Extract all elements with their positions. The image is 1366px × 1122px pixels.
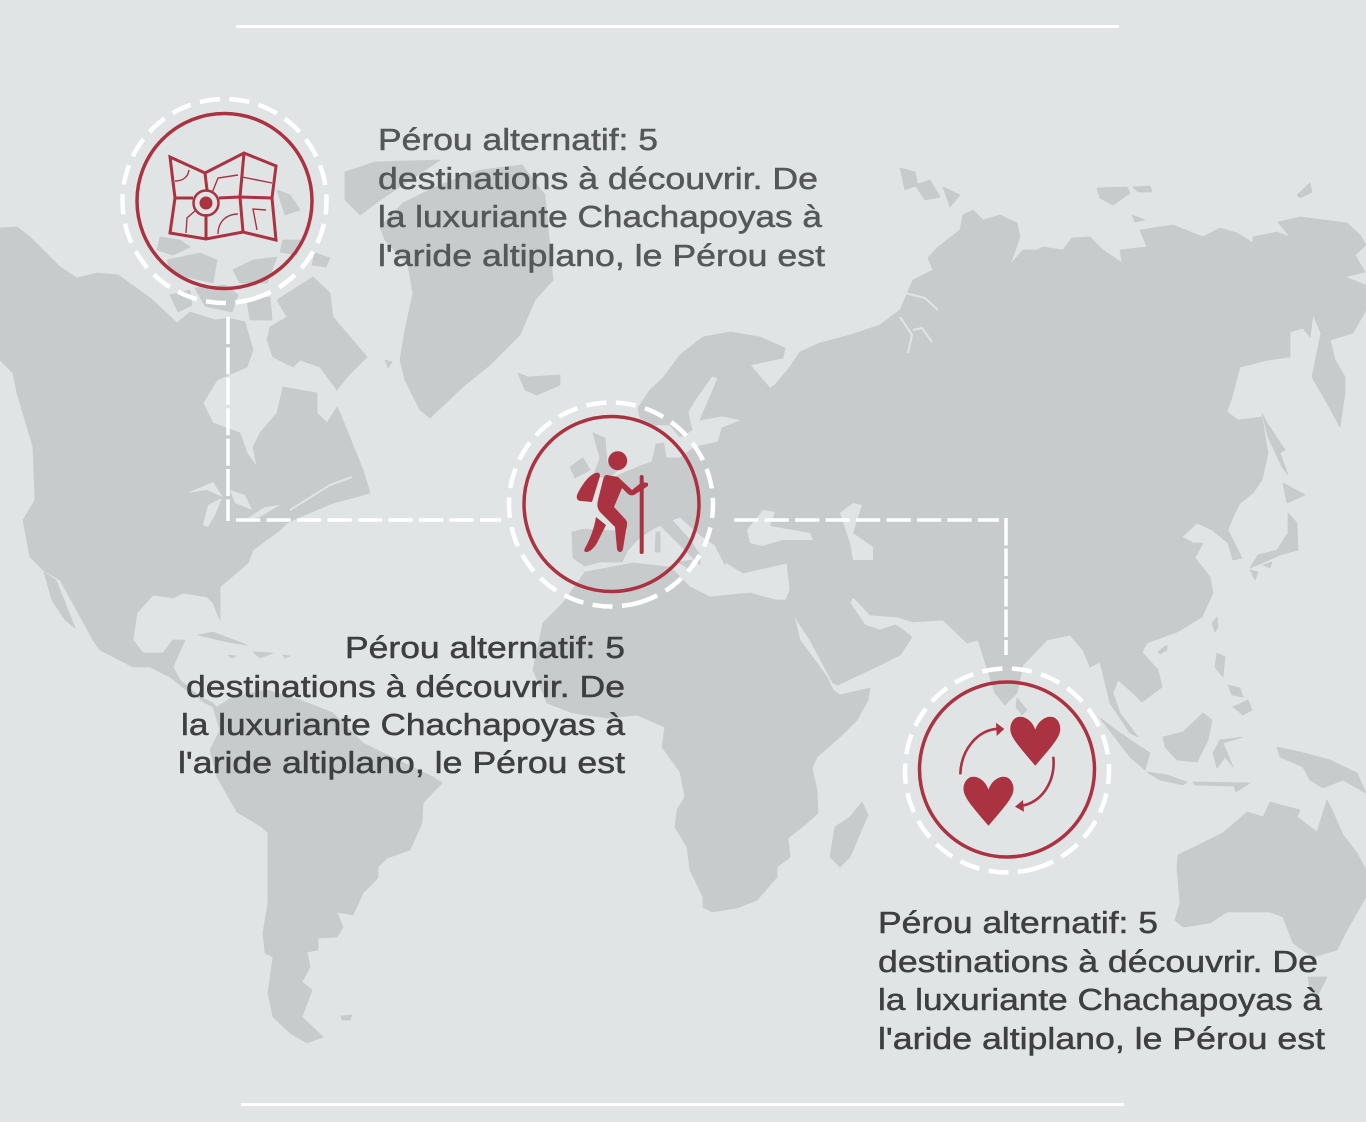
text block 1: la luxuriante Chachapoyas à	[378, 199, 823, 234]
text block 2: Pérou alternatif: 5	[345, 630, 625, 665]
text block 3	[878, 905, 1325, 1056]
land: Great Britain and Ireland	[570, 433, 618, 478]
text block 3: Pérou alternatif: 5	[878, 905, 1158, 940]
land: Baja California	[44, 572, 75, 628]
red ring	[920, 682, 1094, 857]
land: Arctic islands	[157, 160, 440, 390]
text block 1: destinations à découvrir. De	[378, 161, 818, 196]
river and estuary channels	[290, 293, 938, 510]
land: Philippines	[1215, 653, 1252, 715]
water: Black Sea	[747, 510, 813, 546]
inland waters	[187, 482, 873, 560]
land: Java and Sunda islands	[1147, 772, 1250, 792]
land: northern islands	[900, 168, 1312, 222]
land: Africa	[533, 563, 870, 912]
text block 1: l'aride altiplano, le Pérou est	[378, 238, 825, 273]
red ring	[137, 114, 312, 288]
text block 1	[378, 122, 825, 273]
water: Great Lakes	[187, 482, 280, 527]
water: Caspian Sea	[840, 503, 873, 560]
land: Madagascar	[830, 802, 868, 867]
land: South America	[200, 690, 442, 1043]
land: Eurasia	[572, 210, 1366, 737]
icon circle 2: hiker	[509, 402, 713, 606]
icon circle 3: hearts	[905, 668, 1109, 872]
land: North America	[0, 227, 370, 708]
land: Mediterranean islands	[655, 532, 692, 568]
land: Greenland	[380, 165, 553, 418]
dashed ring	[122, 99, 326, 303]
red ring	[524, 416, 699, 592]
world map background	[0, 160, 1366, 1043]
land: Australia	[1175, 800, 1366, 957]
top rule	[236, 25, 1119, 28]
icon: folded map	[170, 153, 276, 240]
icon circle 1: map	[122, 99, 326, 303]
text block 2: l'aride altiplano, le Pérou est	[178, 745, 625, 780]
land: Sakhalin	[1262, 413, 1288, 475]
land: Sulawesi	[1213, 737, 1243, 768]
connector: map to hiker	[228, 317, 501, 521]
land: Japan	[1250, 483, 1305, 580]
text block 1: Pérou alternatif: 5	[378, 122, 658, 157]
land: Tasmania	[1308, 977, 1327, 997]
dashed ring	[905, 668, 1109, 872]
land: Taiwan, Hainan and Sri Lanka	[1016, 617, 1218, 715]
dashed ring	[509, 402, 713, 606]
text block 3: l'aride altiplano, le Pérou est	[878, 1021, 1325, 1056]
text block 2	[178, 630, 626, 780]
land: Caribbean islands	[198, 632, 290, 658]
land: Falkland Islands	[341, 1015, 352, 1020]
text block 3: destinations à découvrir. De	[878, 944, 1318, 979]
land: New Guinea	[1277, 747, 1366, 793]
land: Sumatra	[1100, 718, 1150, 770]
bottom rule	[241, 1103, 1124, 1106]
land: Iceland	[518, 373, 560, 395]
icon: hearts with circular arrows	[960, 717, 1060, 826]
text block 2: destinations à découvrir. De	[186, 669, 625, 704]
text block 2: la luxuriante Chachapoyas à	[181, 707, 626, 742]
connector: hiker to hearts	[734, 518, 1006, 655]
text block 3: la luxuriante Chachapoyas à	[878, 982, 1323, 1017]
icon: hiker	[577, 451, 648, 554]
land: Borneo	[1163, 713, 1212, 762]
